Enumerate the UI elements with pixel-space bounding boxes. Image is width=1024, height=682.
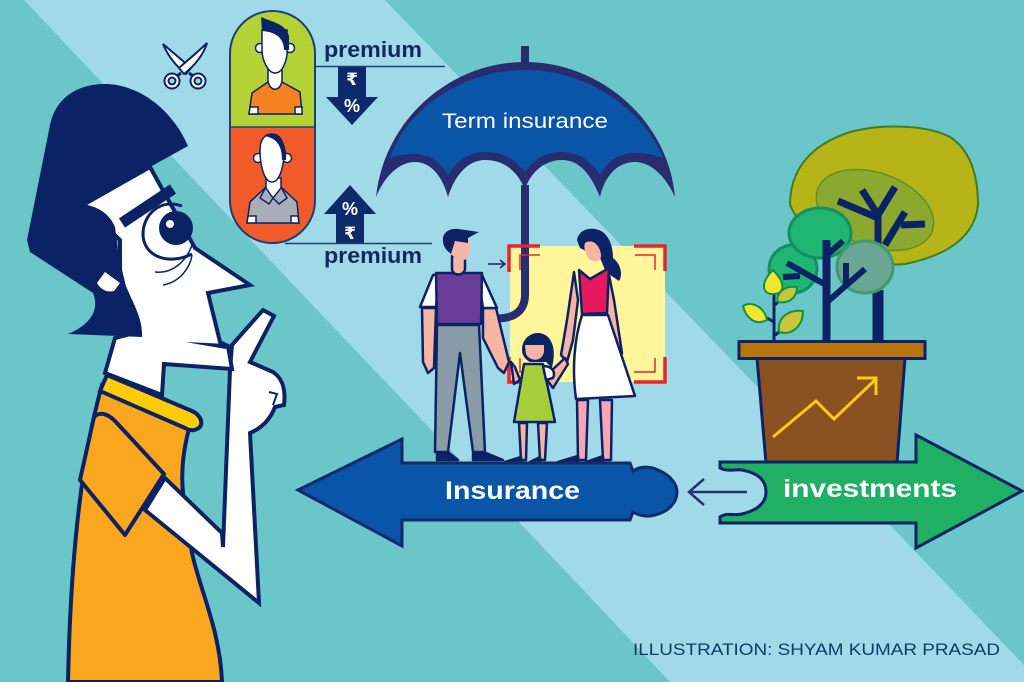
eye bbox=[143, 204, 193, 285]
family bbox=[420, 229, 635, 462]
sprout bbox=[743, 270, 803, 341]
insurance arrow bbox=[298, 439, 677, 546]
older person bbox=[247, 134, 299, 223]
pot body bbox=[757, 358, 905, 463]
premium down callout: % bbox=[344, 96, 360, 116]
arrow: investments toward insurance bbox=[689, 479, 747, 505]
red focus brackets bbox=[509, 246, 665, 382]
big tree canopy bbox=[790, 127, 978, 265]
premium up callout bbox=[285, 185, 432, 268]
thinking man figure bbox=[27, 84, 285, 682]
illustration credit: ILLUSTRATION: SHYAM KUMAR PRASAD bbox=[633, 641, 1000, 659]
label: insurance: Insurance bbox=[445, 477, 580, 505]
face bbox=[83, 167, 250, 395]
premium down callout bbox=[315, 37, 445, 125]
pill bottom bbox=[230, 127, 315, 244]
mother bbox=[558, 229, 635, 462]
premium comparison pill bbox=[230, 11, 315, 244]
icon: scissors bbox=[163, 43, 207, 88]
umbrella bbox=[376, 46, 675, 318]
arrow: premium falls bbox=[326, 67, 378, 125]
yellow collar bbox=[100, 375, 201, 430]
ear bbox=[97, 272, 120, 291]
hair bbox=[27, 84, 188, 337]
big tree trunk and branches bbox=[838, 187, 925, 341]
big tree inner canopy bbox=[805, 154, 945, 266]
yellow highlight square bbox=[510, 246, 665, 382]
label: term insurance: Term insurance bbox=[442, 110, 608, 133]
shirt sleeve bbox=[80, 414, 164, 535]
young person bbox=[249, 17, 302, 114]
shirt body bbox=[68, 385, 222, 682]
canopy bbox=[376, 62, 675, 197]
plant pot with trees bbox=[739, 127, 978, 463]
middle tree trunk bbox=[783, 241, 865, 303]
grey green round tree bbox=[837, 241, 893, 293]
arrow: pointer to bracket bbox=[488, 260, 505, 268]
label: premium: premium bbox=[324, 243, 422, 268]
premium down callout: ₹ bbox=[346, 70, 358, 90]
small round tree bbox=[769, 245, 817, 293]
pill top bbox=[230, 11, 315, 127]
label: premium: premium bbox=[324, 37, 422, 62]
premium up callout: ₹ bbox=[344, 224, 356, 244]
father bbox=[420, 229, 509, 460]
growth chart arrow bbox=[773, 378, 876, 437]
premium up callout: % bbox=[342, 199, 358, 219]
daughter bbox=[505, 333, 568, 462]
label: investments: investments bbox=[783, 475, 957, 503]
eyebrow bbox=[122, 189, 173, 223]
pot rim bbox=[739, 342, 925, 358]
green round tree bbox=[789, 208, 851, 258]
mouth bbox=[185, 342, 228, 349]
handle bbox=[493, 46, 525, 318]
investments arrow bbox=[720, 435, 1022, 548]
arrow: premium rises bbox=[324, 185, 376, 243]
arm and raised finger bbox=[145, 310, 285, 603]
